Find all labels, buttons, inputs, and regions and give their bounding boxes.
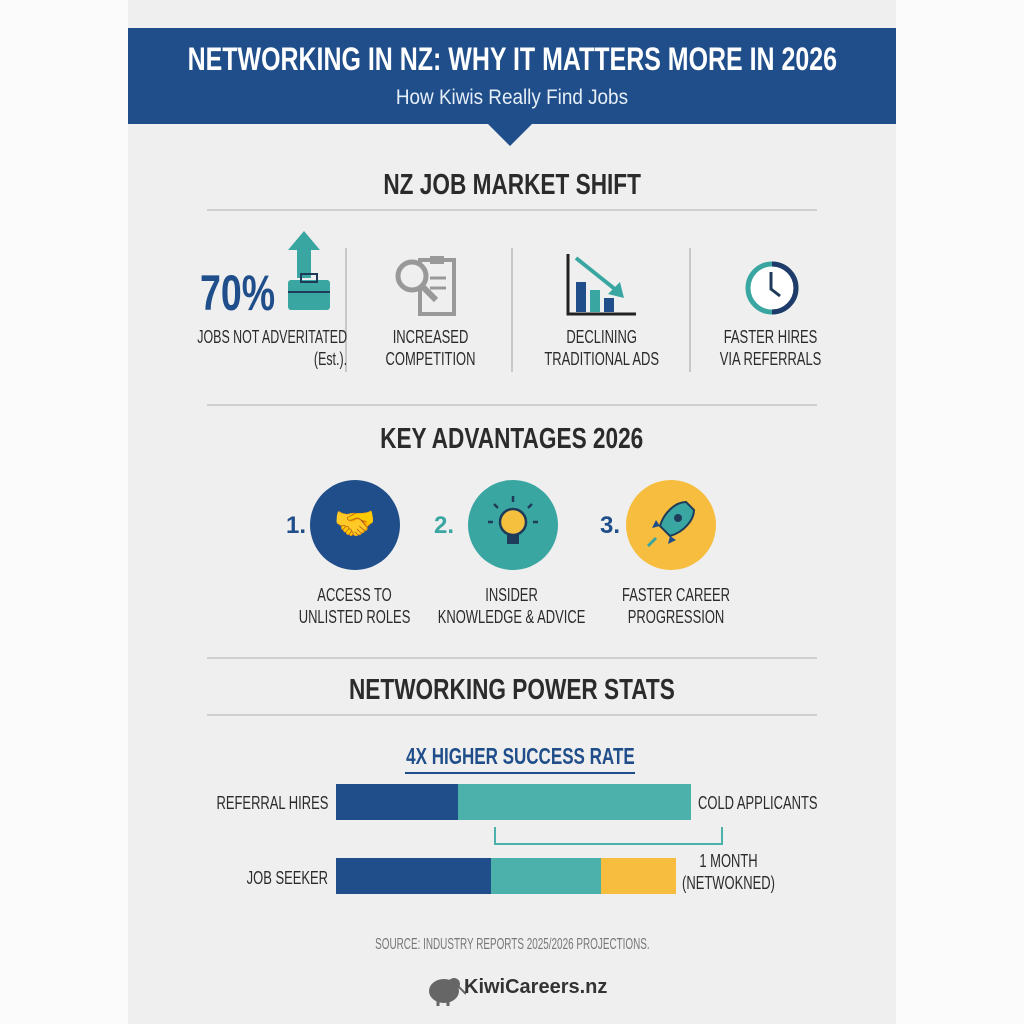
stat: 70%: 70% — [200, 265, 275, 321]
stat: increased competition — [385, 256, 475, 369]
bar chart: COLD APPLICANTS — [698, 793, 818, 813]
subheading: 4x higher success: 4X HIGHER SUCCESS RATE — [406, 743, 634, 769]
stat: increased competition: INCREASED — [392, 327, 468, 347]
panel: job market stats — [197, 231, 822, 372]
advantage 3: PROGRESSION — [628, 607, 724, 627]
advantage 1: 1. — [286, 512, 306, 539]
stat: increased competition: COMPETITION — [385, 349, 475, 369]
stat: faster hires: FASTER HIRES — [724, 327, 818, 347]
source note: SOURCE: INDUSTRY REPORTS 2025/2026 PROJECTIONS. — [375, 936, 649, 953]
advantage 1: 🤝 — [334, 505, 376, 543]
advantage 1: ACCESS TO — [318, 585, 392, 605]
advantage 1: UNLISTED ROLES — [299, 607, 411, 627]
advantage 1 — [286, 480, 411, 627]
bar chart: JOB SEEKER — [247, 868, 328, 888]
advantage 2 — [434, 480, 586, 627]
stat: declining ads: DECLINING — [567, 327, 637, 347]
logo: KiwiCareers.nz — [464, 976, 607, 998]
bar chart — [216, 784, 818, 894]
stat: 70% — [197, 231, 347, 369]
advantage 2: KNOWLEDGE & ADVICE — [438, 607, 586, 627]
panel: main background — [128, 0, 896, 1024]
subtitle: How Kiwis Really Find Jobs — [396, 86, 628, 109]
heading: NZ job market shift: NZ JOB MARKET SHIFT — [383, 169, 641, 201]
bar chart: 1 MONTH — [699, 851, 757, 871]
stat: declining ads: TRADITIONAL ADS — [545, 349, 659, 369]
stat: declining ads — [544, 254, 659, 369]
panel: advantages — [286, 480, 730, 627]
bar chart: REFERRAL HIRES — [216, 793, 328, 813]
title: NETWORKING IN NZ: WHY IT MATTERS MORE IN 2026 — [187, 41, 837, 77]
advantage 3: 3. — [600, 512, 620, 539]
stat: faster hires — [720, 262, 822, 369]
header banner — [128, 28, 896, 146]
advantage 2: 2. — [434, 512, 454, 539]
heading: networking power stats: NETWORKING POWER STATS — [349, 674, 675, 706]
stat: faster hires: VIA REFERRALS — [720, 349, 822, 369]
bar chart: (NETWOKNED) — [682, 873, 774, 893]
advantage 3: FASTER CAREER — [622, 585, 730, 605]
advantage 2: INSIDER — [486, 585, 538, 605]
logo — [429, 976, 607, 1006]
heading: key advantages: KEY ADVANTAGES 2026 — [380, 423, 644, 455]
stat: 70%: (Est.). — [314, 349, 347, 369]
stat: 70%: JOBS NOT ADVERITATED — [197, 327, 347, 347]
advantage 3 — [600, 480, 730, 627]
